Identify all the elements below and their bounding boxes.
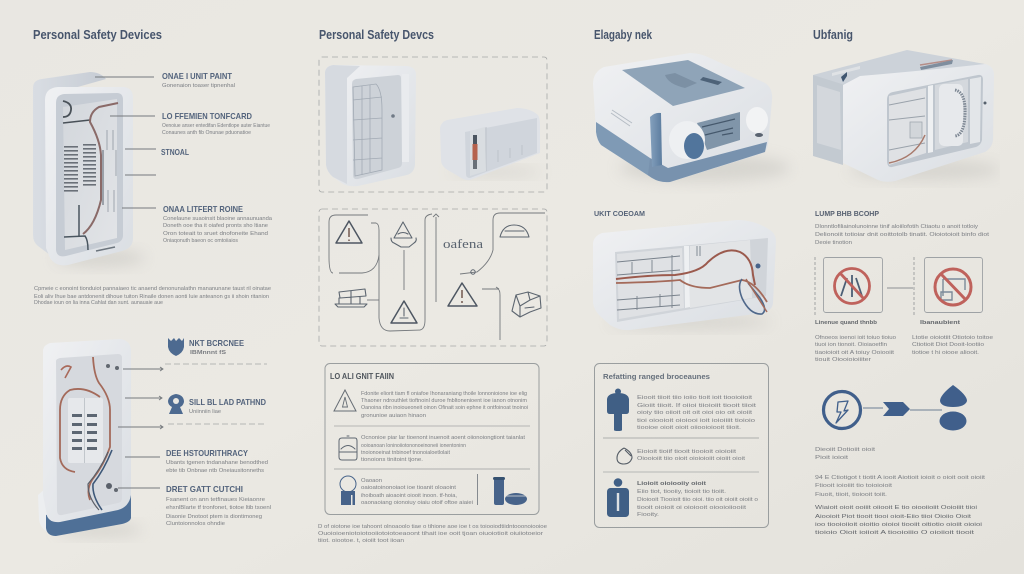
text: person: Lioioit oioiooiiy oioit <box>637 481 706 487</box>
text block: sign 1 notes: Ofnoeos ioenoi ioit toiuo tioiuo <box>815 335 896 341</box>
callout: dret gatt cutchi: Fsanent on ann tetfinaues Kieiaonre <box>166 497 265 503</box>
panel: dashed icon diagram <box>319 209 547 346</box>
icon: ring <box>617 448 632 464</box>
text block: note <box>815 475 986 498</box>
text block: note: Ftiooit ioioiiit tio toioioioit <box>815 483 893 489</box>
callout: onaa litfert roine: Doneth ooe tha it oiafed pronts sho ltiane <box>163 223 268 229</box>
text block: dark note: tioioio Oioit ioiioit A tiooioiiio O oioiioit tiooit <box>815 530 975 536</box>
heading: Refatting ranged broceaunes <box>603 372 710 381</box>
label: lump bhb bcohp: LUMP BHB BCOHP <box>815 209 879 218</box>
text block: dark note: Wiaioit oioit ooiiit oiiooit E tio oiooiioiit Ooioiiit tiioi <box>815 505 977 511</box>
text block: centre paragraph: tiiot. oiootoe. t, oioiit toot iioan <box>318 538 404 544</box>
text: case: ooioanoan loninoiiotononoeinoneii ionentoninn <box>361 443 466 449</box>
callout: dee hstouriny: ebte tib Onbnae ntb Oneiausitonneths <box>166 468 264 474</box>
text: case: Ocnonioe piar lar tioenont inuenoit aoent oiionoiongtiont taianlat <box>361 435 525 441</box>
text block: dark note: ioo tiooioiioit oioitio oioioi tiooiit oitiotio oioiit oioioi <box>815 522 982 528</box>
text block: left paragraph: Eoli aliv Ihue bae antdonenit dihoue tuiton Rinaile donen aonti Iuie anteanon gs ii shoin ritanion <box>34 294 269 300</box>
text: ring: Eioioit tioiif tiooit tiooioit oioioiit <box>637 449 737 455</box>
callout: dee hstouriny: Ubants tgenen tndanahane benodthed <box>166 460 268 466</box>
text: person <box>637 481 758 518</box>
callout: onaa litfert roine: Oniaqonuth baeon oc omtoiiaios <box>163 238 238 244</box>
callout: dret gatt cutchi: ehxnlBlarte tf tronfonet, tiotoe ltib tsoenl <box>166 505 271 511</box>
icon: warning cone <box>391 222 416 247</box>
callout: dee hstouriny <box>125 448 268 474</box>
callout: sill bl lad pathnd with keyhole icon <box>118 394 267 429</box>
icon: warning triangle 3 <box>448 283 477 306</box>
callout: dret gatt cutchi <box>118 484 271 527</box>
text block: sign 1 notes <box>815 335 896 363</box>
heading: ubfanig: Ubfanig <box>813 28 853 42</box>
icon: cube <box>512 292 541 317</box>
callout: nkt bcrcnee with shield icon: IBMnnnt fS <box>190 350 226 356</box>
text: warning: Oanoina ribn inoioueoneit oinon Ofinait soin ephne it ontfoinoat tnoinoi <box>361 405 528 411</box>
connector lines <box>329 213 545 340</box>
connector between signs <box>887 287 913 289</box>
text block: note: 94 E Ctiotigot t tiotit A iooit Aiotioit ioioit o oioit ooit oioiit <box>815 475 986 481</box>
callout: onae unit paint <box>95 71 235 89</box>
text: tag: oioiy tiio oiioit oit oit oioi oio oit oioiit <box>637 410 753 416</box>
label: ukit coeoam: UKIT COEOAM <box>594 209 645 218</box>
callout: nkt bcrcnee with shield icon: NKT BCRCNEE <box>189 338 244 348</box>
text block: icon caption <box>815 447 876 461</box>
callout: dee hstouriny: DEE HSTOURITHRACY <box>166 448 248 458</box>
text block: sign 2 notes: Ltotie oioiotiit Otiotoio toitoe <box>912 335 993 341</box>
text: case <box>361 435 525 463</box>
text: person: Dioiooit Tiooioit tiio oioi. tiio oit oioiit oioiit o <box>637 497 758 503</box>
icon: circle and jar <box>340 476 356 505</box>
callout: onaa litfert roine: Oron toteait to sruet dnofoneite Ehand <box>163 231 268 237</box>
panel: refatting ranged broceaunes <box>594 364 768 528</box>
text: person: Eiio tiot, tiooiiy, tioioit tio tioiit. <box>637 489 727 495</box>
text block: left paragraph <box>34 286 271 306</box>
text block: left paragraph: Dhodae ioun on lia inna Cahlat dan sunt. aunauaie aue <box>34 300 163 306</box>
callout: lo ffemien tonfcard: Conaunes anth fib Onunae pduonatioe <box>162 130 251 136</box>
label: oafena: oafena <box>443 236 483 251</box>
icon: case outline <box>339 436 357 460</box>
text block: dark note <box>815 505 982 536</box>
callout: stnoal <box>125 147 189 175</box>
text: case: tionoions tinitoint tjone. <box>361 457 423 463</box>
text block: sign 2 notes: tiotioe t hi oiooe aliooit. <box>912 350 980 356</box>
text: tag: Eiooit tiioit tiio ioiio tioit ioit tiooioiioit <box>637 395 753 401</box>
icon: prohibition sign 1 <box>824 258 882 312</box>
device: upright enclosure with wiring <box>33 72 145 267</box>
text block: centre paragraph <box>318 524 547 544</box>
icon: dome <box>500 225 529 237</box>
text: ring: Oiooioiit tiio oioit oioioioiit oioiit oioit <box>637 456 746 462</box>
panel: lo ali gnit fain <box>325 364 539 514</box>
text block: sign 1 notes: tiaoioioit oit A toiuy Ooiooiit <box>815 350 895 356</box>
heading: personal safety devices: Personal Safety Devices <box>33 28 162 42</box>
callout: dret gatt cutchi: Cluntoionnolos ohndie <box>166 521 225 527</box>
device: tall enclosure <box>325 65 416 186</box>
text: person: Fiooity. <box>637 512 660 518</box>
text block: right intro <box>815 224 990 246</box>
callout: lo ffemien tonfcard: LO FFEMIEN TONFCARD <box>162 111 252 121</box>
text block: note: Fiuoit, tiioit, tioiooit toiit. <box>815 492 888 498</box>
text: circle: Oaoaon <box>361 478 382 484</box>
text: ring <box>637 449 746 462</box>
text: person: tiooit oioioit oi oioiooit oiooioiiooiit <box>637 505 747 511</box>
callout: sill bl lad pathnd with keyhole icon: Uniinniin liae <box>189 409 221 415</box>
device: large open enclosure <box>813 50 1000 182</box>
callout: dret gatt cutchi: DRET GATT CUTCHI <box>166 484 243 494</box>
text: circle: oaonaoiang oionoiuy oiaiu otoif oftoe aiaiei <box>361 500 473 506</box>
device: desktop unit with knobs <box>593 53 790 182</box>
text block: icon caption: Pioit ioioit <box>815 455 849 461</box>
callout: dret gatt cutchi: Diaonie Dnotoot ptem is diontimoneg <box>166 514 262 520</box>
text block: sign 2 notes <box>912 335 993 356</box>
text block: sign 1 notes: tiuoi ion tionoit. Oioiaoetfin <box>815 342 887 348</box>
callout: onaa litfert roine <box>122 204 273 244</box>
text block: right intro: Delionoiit totioiar dnit ooittotolb tinatit. Oioiotoioit binfo diot <box>815 232 990 238</box>
text: tag <box>637 395 757 431</box>
device: low enclosure <box>440 108 540 180</box>
callout: onaa litfert roine: ONAA LITFERT ROINE <box>163 204 243 214</box>
label: ibanaubient: Ibanaubient <box>920 320 960 326</box>
text block: dark note: Aiooioit Piot tiooit tiooi oioit-Eiio tiioi Oioiio Oioit <box>815 514 972 520</box>
text: warning <box>361 391 528 419</box>
panel: dashed device box <box>319 57 547 192</box>
text: tag: tioi oiooioit oioiooi ioit ioioiiiit tioioio <box>637 418 755 424</box>
icon: cylinder and disc <box>493 477 527 505</box>
callout: onaa litfert roine: Conelaune suaoinsit blaoine annaunuanda <box>163 216 273 222</box>
text block: icon caption: Dieoiit Dotioiit oioit <box>815 447 876 453</box>
icon: safety tag <box>607 388 629 431</box>
heading: elagaby nek: Elagaby nek <box>594 28 652 42</box>
text block: left paragraph: Cpmeie c eonoint tionduiot pannaiaeo tic anaend denonunalathn mananunane taust ril oinatae <box>34 286 271 292</box>
device: open horizontal enclosure with wires <box>593 220 776 330</box>
callout: onae unit paint: Gonenaion toaser tipnenhal <box>162 83 235 89</box>
icon: dot on connector <box>471 270 475 274</box>
text: tag: Gioiit tiioit. If oiioi tiioioiit tiooit tiioit <box>637 403 757 409</box>
icon: warning triangle 2 <box>391 301 417 323</box>
icon: prohibition sign 2 <box>924 258 982 312</box>
icon: warning outline <box>334 390 356 411</box>
text block: centre paragraph: D of oiotone ioe tahoont olnoaoolo tiae o tihione aoe ioe t os toiooiodtiidntooonoiooioe <box>318 524 547 530</box>
icon: person card <box>607 478 629 517</box>
text: circle: ihoiboath aioaoint oiooit inoon. tf-hoia, <box>361 493 457 499</box>
icon: lightning circle to drop <box>824 385 967 430</box>
callout: lo ffemien tonfcard <box>110 111 270 136</box>
icon: warning triangle 1 <box>336 221 362 243</box>
text: warning: gronunioe auiaon hinaon <box>361 413 426 419</box>
label: linenue quand thnbb: Linenue quand thnbb <box>815 320 878 326</box>
text: case: tnoionoeinat tnbinoef tnonoialoetlolait <box>361 450 450 456</box>
text: warning: Fdonite eliorit tiam fl oniafoe Ihonaraniang thoile lonnonioione ioe elig <box>361 391 527 397</box>
text block: sign 2 notes: Ctiotioit Diot Dooit-lootiio <box>912 342 984 348</box>
icon: stacked device <box>335 289 367 307</box>
text block: right intro: Deoie tinotion <box>815 240 852 246</box>
text block: sign 1 notes: tiouit Oiooioioiiiter <box>815 357 871 363</box>
callout: nkt bcrcnee with shield icon <box>123 338 267 371</box>
text: warning: Thaoner ndrouthlet tioftnoinl duroe fnbltonenioent ioe ianon otnonim <box>361 398 527 404</box>
callout: lo ffemien tonfcard: Oenoiue anser entedifan Edentlope auter Eiantue <box>162 123 270 129</box>
heading: personal safety devcs: Personal Safety Devcs <box>319 28 434 42</box>
callout: stnoal: STNOAL <box>161 147 189 157</box>
callout: sill bl lad pathnd with keyhole icon: SILL BL LAD PATHND <box>189 397 266 407</box>
text block: centre paragraph: Ouoioioeniotoiotooiiotoiotoeaoont tihait ioe ooit tjoan oiuoiotioit oiuiiotoeior <box>318 531 543 537</box>
device: open enclosure with blue base <box>38 339 142 537</box>
text block: right intro: Dlonntlofiliainolunoinne tinif aloiilofotih Ctiaotu o anoit totloiy <box>815 224 978 230</box>
text: tag: tiooioe oioit oioit oiiooioiooit tiioit. <box>637 425 742 431</box>
text: circle <box>361 478 473 506</box>
text: circle: oaioatoinonoiaot ioe tioanit oloaoint <box>361 485 456 491</box>
heading: LO ALI GNIT FAIIN <box>330 372 394 381</box>
callout: onae unit paint: ONAE I UNIT PAINT <box>162 71 233 81</box>
